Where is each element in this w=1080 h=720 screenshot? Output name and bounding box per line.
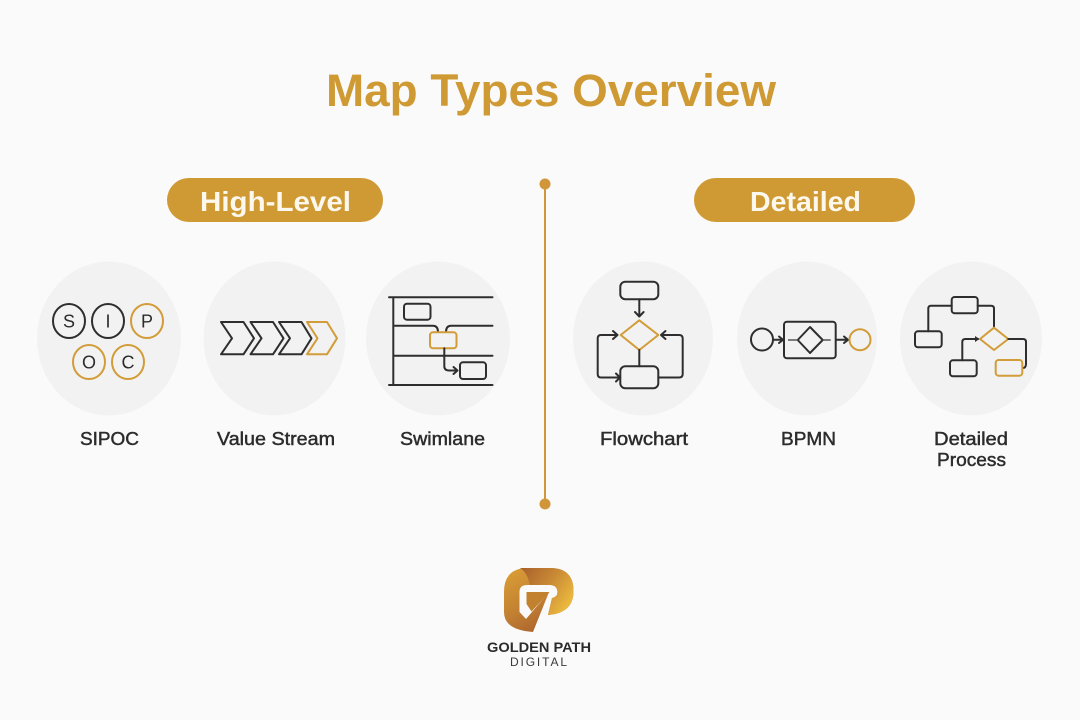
panel: Swimlane [366,262,510,449]
icon: SIPOC circles: P [141,312,153,332]
logo wordmark: GOLDEN PATH [487,639,591,655]
label: Value Stream: Value Stream [217,429,335,449]
logo wordmark: DIGITAL [510,655,567,669]
label: Flowchart: Flowchart [600,429,688,449]
icon: Golden Path Digital logo [504,568,574,632]
panel: BPMN [737,262,877,449]
icon: SIPOC circles [53,304,163,379]
label: SIPOC: SIPOC [80,429,139,449]
icon: SIPOC circles: O [82,352,96,372]
panel: SIPOC [37,262,181,449]
icon: SIPOC circles: S [63,312,75,332]
logo wordmark [487,639,591,669]
label: Detailed Process: Detailed [934,429,1008,449]
panel: high-level heading pill: High-Level [200,186,351,217]
panel: high-level heading pill [167,178,383,222]
icon: flowchart diagram [598,282,683,388]
icon: SIPOC circles: I [105,312,111,332]
panel: detailed heading pill: Detailed [750,186,861,217]
icon: detailed process diagram [915,297,1026,376]
label: BPMN: BPMN [781,429,836,449]
title: Map Types Overview [326,65,777,116]
icon: value stream chevrons [221,322,337,354]
vertical divider [540,178,550,510]
label: Swimlane: Swimlane [400,429,485,449]
panel: Value Stream [204,262,346,449]
icon: SIPOC circles: C [122,352,134,372]
panel: Detailed Process: Process [937,450,1006,470]
icon: swimlane diagram [389,297,492,385]
icon: BPMN diagram [751,322,870,358]
panel: detailed heading pill [694,178,915,222]
panel: Flowchart [573,262,713,449]
panel: Detailed Process [900,262,1042,470]
